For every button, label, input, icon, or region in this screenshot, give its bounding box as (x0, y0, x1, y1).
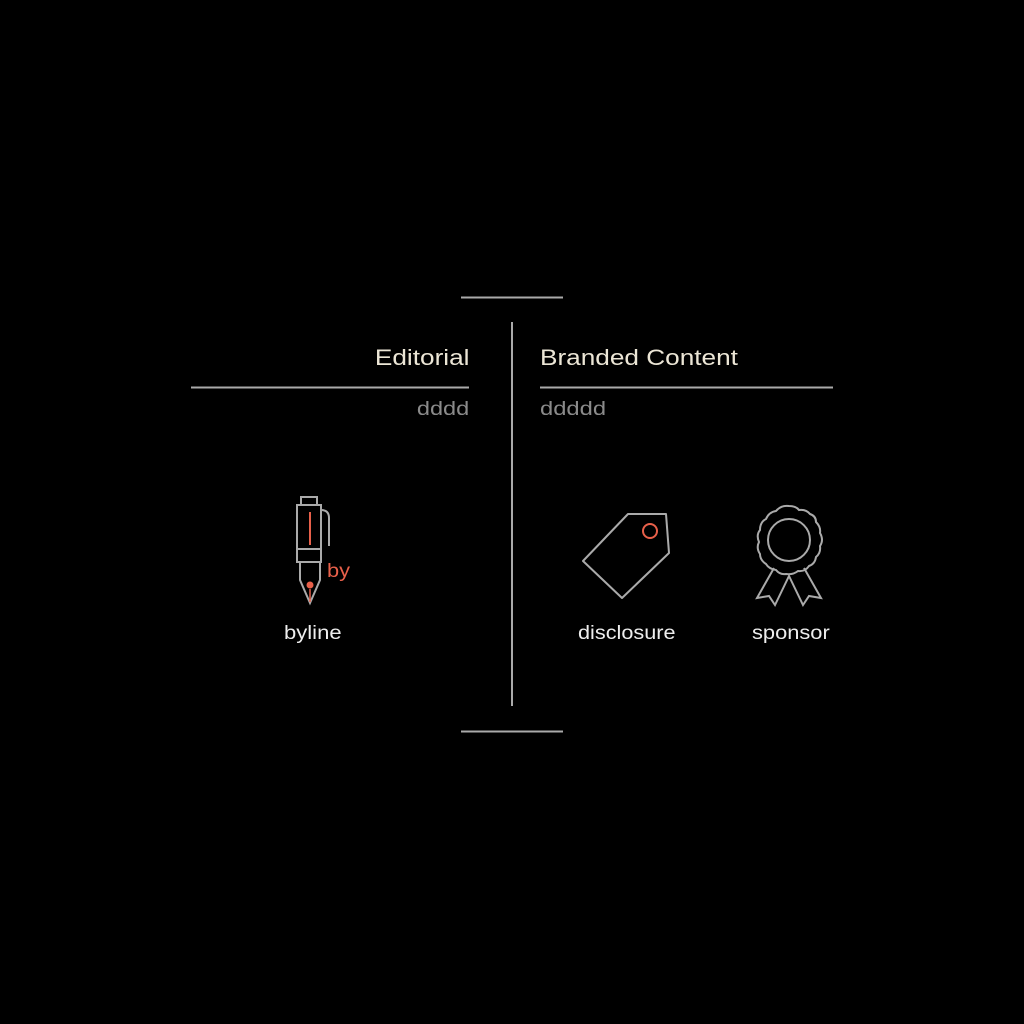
subtext: ddddd: ddddd (540, 399, 606, 420)
icon: fountain pen byline (296, 496, 351, 606)
icon: tag (582, 513, 670, 599)
subtext: dddd: dddd (417, 399, 469, 420)
heading: Editorial: Editorial (374, 345, 469, 370)
icon: fountain pen byline: by (327, 560, 351, 582)
label: byline: byline (284, 623, 342, 644)
icon: rosette (755, 504, 823, 607)
heading: Branded Content: Branded Content (540, 345, 738, 370)
label: sponsor: sponsor (752, 623, 830, 644)
label: disclosure: disclosure (578, 623, 676, 644)
